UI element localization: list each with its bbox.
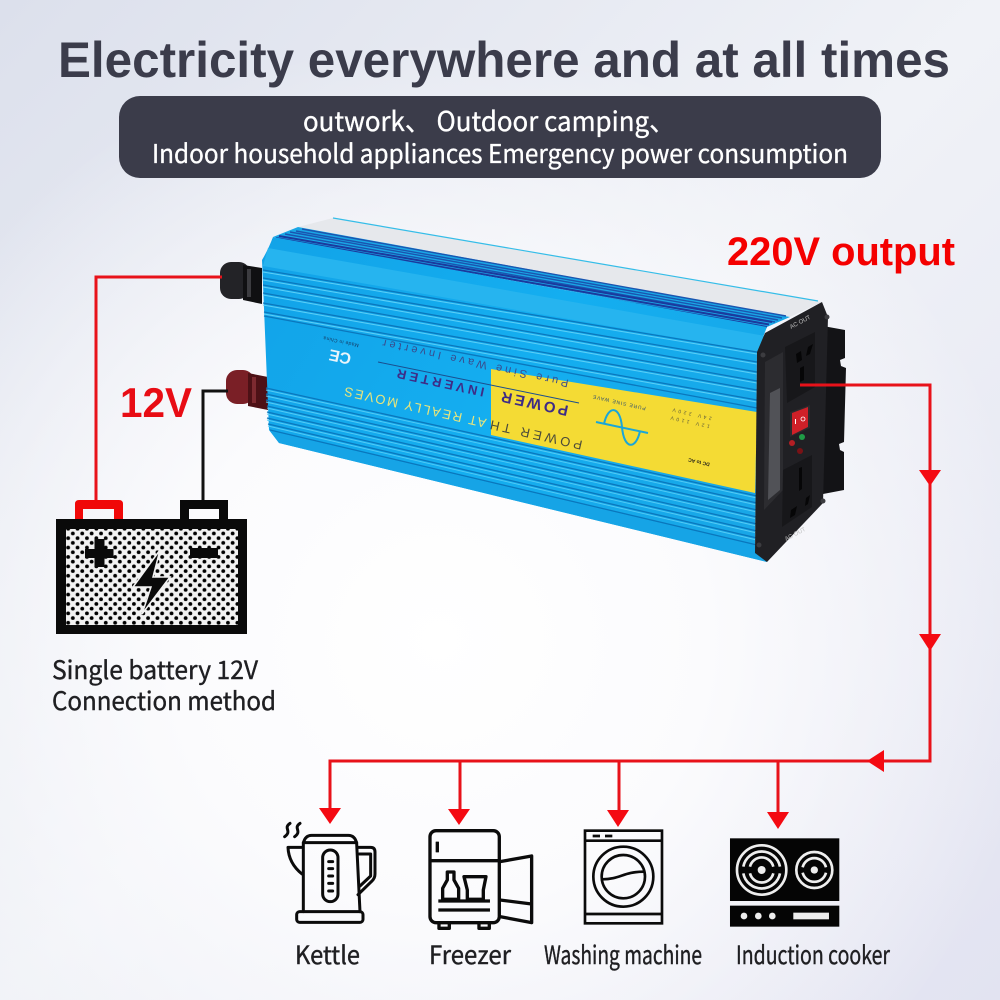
yellow label: [491, 369, 757, 493]
sine wave icon: [596, 410, 648, 445]
arrows: [319, 470, 941, 829]
appliance labels: Induction cooker: [736, 936, 890, 972]
battery icon: [56, 500, 247, 634]
product printed text: Pure Sine Wave Inverter: [381, 337, 570, 389]
product printed text: INVERTER: [395, 366, 486, 400]
product printed text: AT REALLY MOVES: [343, 384, 488, 431]
terminal: positive red: [226, 370, 268, 410]
product printed text: 24V 220V: [671, 406, 712, 421]
product printed text: CE: [327, 345, 353, 367]
product printed text: Made in China: [323, 334, 359, 348]
AC OUT labels: [784, 315, 812, 543]
output wiring: [330, 385, 930, 812]
appliance labels: Kettle: [295, 936, 360, 972]
terminal: red: [75, 500, 123, 519]
appliance labels: Freezer: [429, 936, 511, 972]
inverter product: [220, 218, 846, 562]
subtitle pill: outwork、 Outdoor camping、: [303, 100, 675, 139]
bottom lip: [270, 431, 767, 562]
plate screws: [756, 314, 830, 548]
front face lower ribs: [266, 388, 757, 545]
label divider lines: [378, 362, 579, 403]
front face: [262, 237, 767, 562]
label: 12V: 12V: [120, 379, 192, 426]
terminal: negative black: [220, 262, 262, 304]
battery caption: Connection method: [52, 682, 276, 718]
bright chamfer highlight: [263, 248, 765, 352]
product printed text: 12V 110V: [669, 414, 710, 429]
appliance labels: [295, 936, 890, 972]
lightning bolt: [133, 550, 170, 614]
mounting bracket: [823, 326, 846, 494]
appliance labels: Washing machine: [544, 936, 702, 972]
top chamfer ribs: [272, 227, 790, 327]
icon: kettle: [285, 823, 375, 922]
top white strip: [298, 218, 822, 317]
display window: [764, 352, 783, 510]
power switch: [790, 405, 810, 437]
product printed text: PURE SINE WAVE: [592, 393, 646, 411]
upper socket: [785, 332, 815, 403]
terminal: black: [180, 500, 228, 519]
indicator LEDs: [789, 434, 805, 454]
subtitle pill: [119, 96, 881, 178]
battery caption: [52, 651, 276, 718]
subtitle pill: Indoor household appliances Emergency power consumption: [152, 134, 848, 171]
minus sign: [190, 548, 218, 558]
front face upper ribs: [263, 270, 757, 408]
wire: positive red: [96, 277, 222, 501]
battery caption: Single battery 12V: [52, 651, 259, 687]
icon: washing machine: [585, 831, 662, 923]
battery body: [56, 519, 247, 634]
icon: freezer: [430, 831, 532, 928]
product printed text: POWER TH: [489, 417, 584, 453]
product printed text: [323, 334, 712, 467]
plus sign: [85, 539, 114, 567]
wire: negative black: [203, 391, 228, 501]
AC OUT labels: AC OUT: [784, 527, 807, 543]
title: Electricity everywhere and at all times: [58, 32, 950, 88]
label: 220V output: 220V output: [727, 230, 955, 274]
product printed text: POWER: [500, 388, 570, 419]
icon: induction cooker: [730, 838, 839, 927]
black end plate: [755, 302, 828, 562]
product printed text: DC to AC: [687, 456, 710, 467]
white strip cyan edge: [333, 218, 818, 301]
lower socket: [782, 455, 812, 527]
AC OUT labels: AC OUT: [789, 315, 812, 331]
